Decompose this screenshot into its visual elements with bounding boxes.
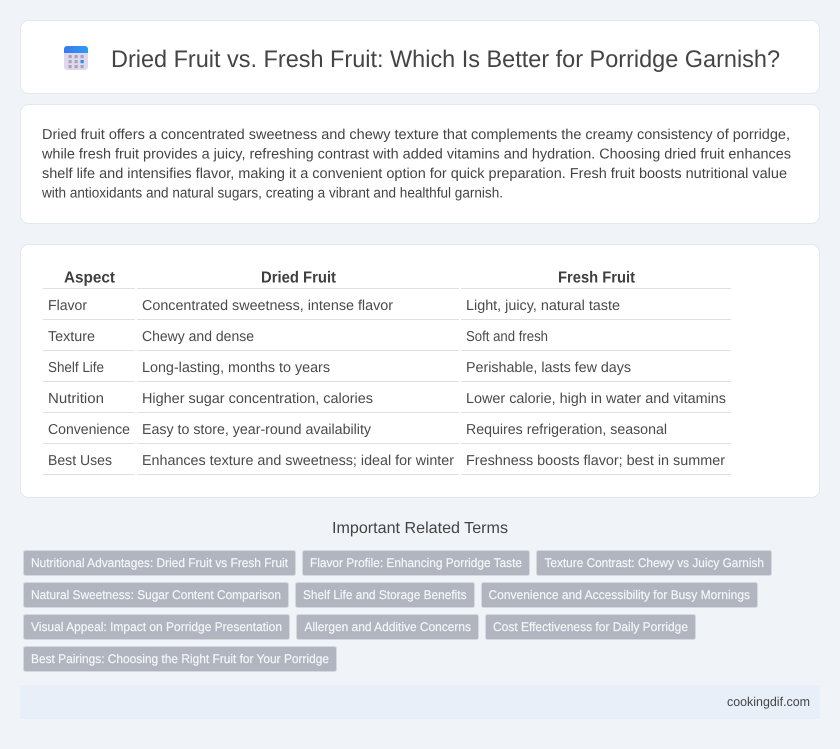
tag group: related terms: Cost Effectiveness for Daily Porridge — [493, 620, 688, 634]
row: texture: Chewy and dense — [142, 329, 254, 345]
tag group: related terms: Shelf Life and Storage Benefits — [303, 588, 466, 602]
tag group: related terms: Best Pairings: Choosing the Right Fruit for Your Porridge — [31, 652, 329, 666]
table headers: Dried Fruit — [261, 270, 337, 286]
panel: title header — [20, 20, 820, 94]
tag group: related terms: Nutritional Advantages: Dried Fruit vs Fresh Fruit — [31, 556, 288, 570]
tag group: related terms — [24, 550, 772, 672]
row: texture: Soft and fresh — [466, 329, 548, 345]
row: shelf life — [48, 360, 631, 376]
row: best uses — [48, 453, 725, 469]
row: texture: Texture — [48, 329, 95, 345]
row: convenience: Requires refrigeration, seasonal — [466, 422, 667, 438]
tag group: related terms: Convenience and Accessibility for Busy Mornings — [488, 588, 750, 602]
tag group: related terms: Flavor Profile: Enhancing Porridge Taste — [310, 556, 522, 570]
panel: comparison table — [20, 244, 820, 498]
row: texture — [48, 329, 548, 345]
summary text: shelf life and intensifies flavor, making it a convenient option for quick preparation. Fresh fruit boosts nutritional value — [42, 166, 787, 182]
summary text: with antioxidants and natural sugars, creating a vibrant and healthful garnish. — [41, 186, 503, 202]
row: nutrition: Lower calorie, high in water and vitamins — [466, 391, 726, 407]
row: shelf life: Shelf Life — [48, 360, 104, 376]
row: flavor: Flavor — [48, 298, 87, 314]
row: best uses: Best Uses — [48, 453, 112, 469]
row: best uses: Enhances texture and sweetness; ideal for winter — [142, 453, 454, 469]
table headers — [64, 270, 636, 286]
tag group: related terms: Texture Contrast: Chewy vs Juicy Garnish — [544, 556, 764, 570]
row: nutrition — [48, 391, 726, 407]
row: shelf life: Perishable, lasts few days — [466, 360, 631, 376]
row: nutrition: Higher sugar concentration, calories — [142, 391, 373, 407]
row: nutrition: Nutrition — [48, 391, 104, 407]
tag group: related terms: Natural Sweetness: Sugar Content Comparison — [31, 588, 281, 602]
summary text: while fresh fruit provides a juicy, refreshing contrast with added vitamins and hydration. Choosing dried fruit enhances — [41, 146, 791, 162]
row: convenience: Convenience — [48, 422, 130, 438]
row: flavor — [48, 298, 620, 314]
row: shelf life: Long-lasting, months to years — [142, 360, 330, 376]
tag group: related terms: Visual Appeal: Impact on Porridge Presentation — [31, 620, 282, 634]
row: flavor: Light, juicy, natural taste — [466, 298, 620, 314]
footer — [20, 685, 820, 719]
row: convenience: Easy to store, year-round availability — [142, 422, 372, 438]
summary text — [41, 127, 791, 202]
panel: summary — [20, 104, 820, 224]
table headers: Fresh Fruit — [558, 270, 636, 286]
row: flavor: Concentrated sweetness, intense flavor — [142, 298, 393, 314]
table headers: Aspect — [64, 270, 116, 286]
row: best uses: Freshness boosts flavor; best in summer — [466, 453, 725, 469]
section heading: related terms: Important Related Terms — [332, 520, 508, 537]
row: convenience — [48, 422, 667, 438]
icon: calendar — [64, 46, 88, 70]
title: Dried Fruit vs. Fresh Fruit: Which Is Better for Porridge Garnish? — [111, 46, 780, 73]
summary text: Dried fruit offers a concentrated sweetness and chewy texture that complements the creamy consistency of porridge, — [42, 127, 790, 143]
footer source: cookingdif.com — [727, 694, 810, 709]
tag group: related terms: Allergen and Additive Concerns — [304, 620, 471, 634]
